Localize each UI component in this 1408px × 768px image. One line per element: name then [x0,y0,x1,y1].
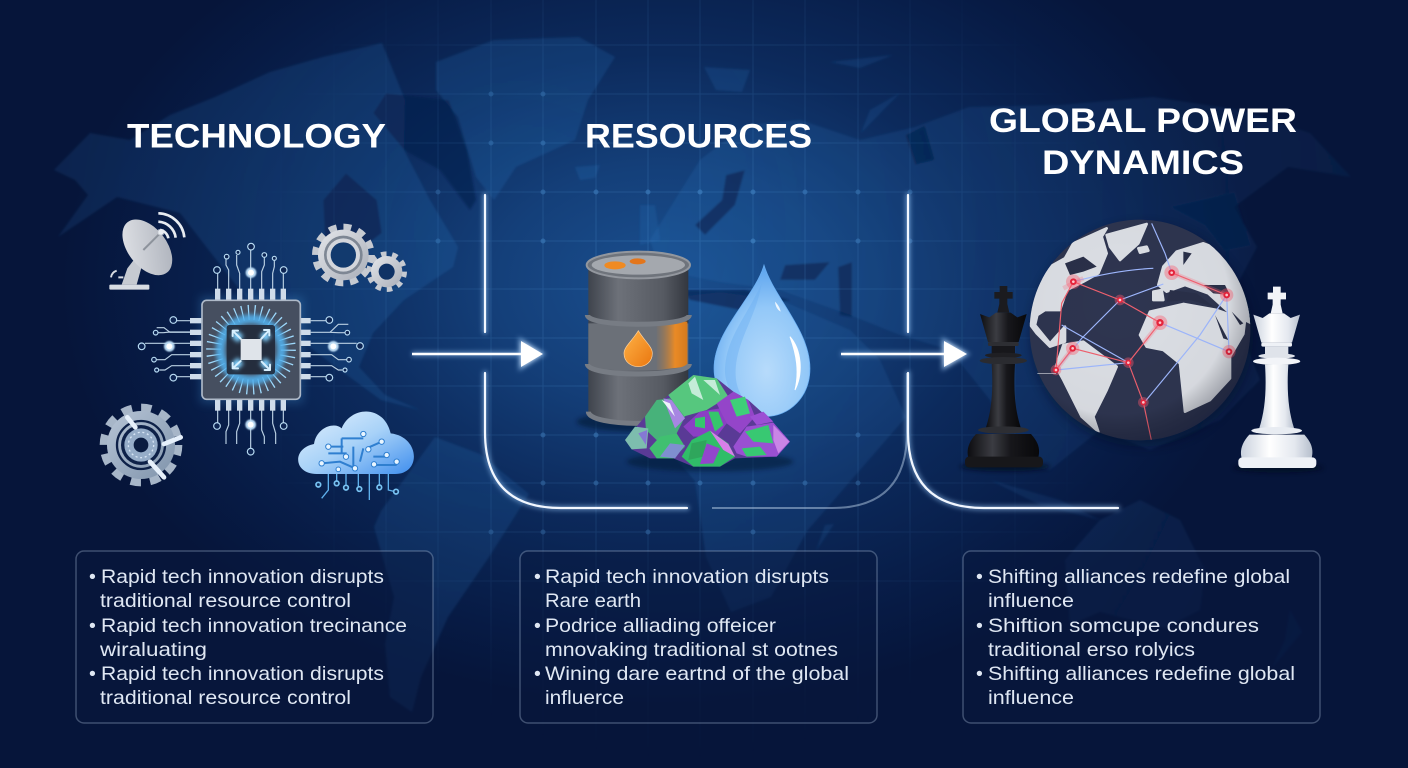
panel: global power dynamics: Shiftion somcupe condures [988,615,1259,637]
icon: white king [1233,287,1323,473]
grid lines [322,0,1035,638]
technology icons [105,210,414,500]
icon: cloud circuit [298,411,414,500]
icon: water drop [714,265,810,417]
panel: technology [76,551,433,723]
icon: microchip [138,243,363,455]
panel: global power dynamics: • [976,663,983,685]
title: global power dynamics [989,102,1297,182]
title: technology: TECHNOLOGY [127,118,386,156]
panel: resources: Wining dare eartnd of the global [545,663,849,685]
icon: globe with network [1027,220,1253,447]
globe land [1027,224,1252,432]
globe network lines [1056,223,1229,442]
panel: global power dynamics: influence [988,590,1074,612]
bracket connector: faint middle [712,373,907,508]
panel: resources: Rapid tech innovation disrupts [545,566,829,588]
panel: resources: Podrice alliading offeicer [545,615,777,637]
panel: global power dynamics: Shifting alliances redefine global [988,566,1290,588]
icon: satellite dish [109,210,184,290]
title: global power dynamics: GLOBAL POWER [989,102,1297,140]
panel: resources: Rare earth [545,590,641,612]
panel: global power dynamics: traditional erso rolyics [988,639,1195,661]
panel: global power dynamics: Shifting alliances redefine global [988,663,1295,685]
panel: resources: • [534,615,541,637]
icon: gear pair [316,228,404,289]
title: resources: RESOURCES [585,118,812,156]
resources icons [577,252,810,472]
global power icons [960,220,1323,473]
panel: resources: • [534,566,541,588]
bracket connector: left [485,195,687,508]
panel: technology: Rapid tech innovation disrupts [101,566,384,588]
arrow: resources to global power [841,341,967,367]
panel: resources [520,551,877,723]
panel: technology: traditional resource control [100,687,351,709]
chip pins [190,289,311,411]
panel: technology: • [89,566,96,588]
panel: technology: Rapid tech innovation trecinance [101,615,407,637]
icon: circuit gear [105,409,181,481]
panel: technology: • [89,663,96,685]
panel: resources: • [534,663,541,685]
globe network nodes [1051,265,1236,408]
panel: global power dynamics: influence [988,687,1074,709]
chip leads [145,249,357,448]
title: global power dynamics: DYNAMICS [1042,144,1244,182]
panel: global power dynamics: • [976,615,983,637]
panel: resources: mnovaking traditional st ootnes [545,639,838,661]
panel: technology: Rapid tech innovation disrupts [101,663,384,685]
panel: technology: • [89,615,96,637]
panel: global power dynamics: • [976,566,983,588]
arrow: technology to resources [412,341,543,367]
icon: rare earth gems [625,375,793,472]
panel: resources: influerce [545,687,624,709]
panel: technology: wiraluating [99,639,207,661]
icon: black king [960,286,1050,471]
panel: global power dynamics [963,551,1320,723]
bracket connector: right [908,195,1118,508]
icon: oil barrel [577,252,703,432]
panel: technology: traditional resource control [100,590,351,612]
